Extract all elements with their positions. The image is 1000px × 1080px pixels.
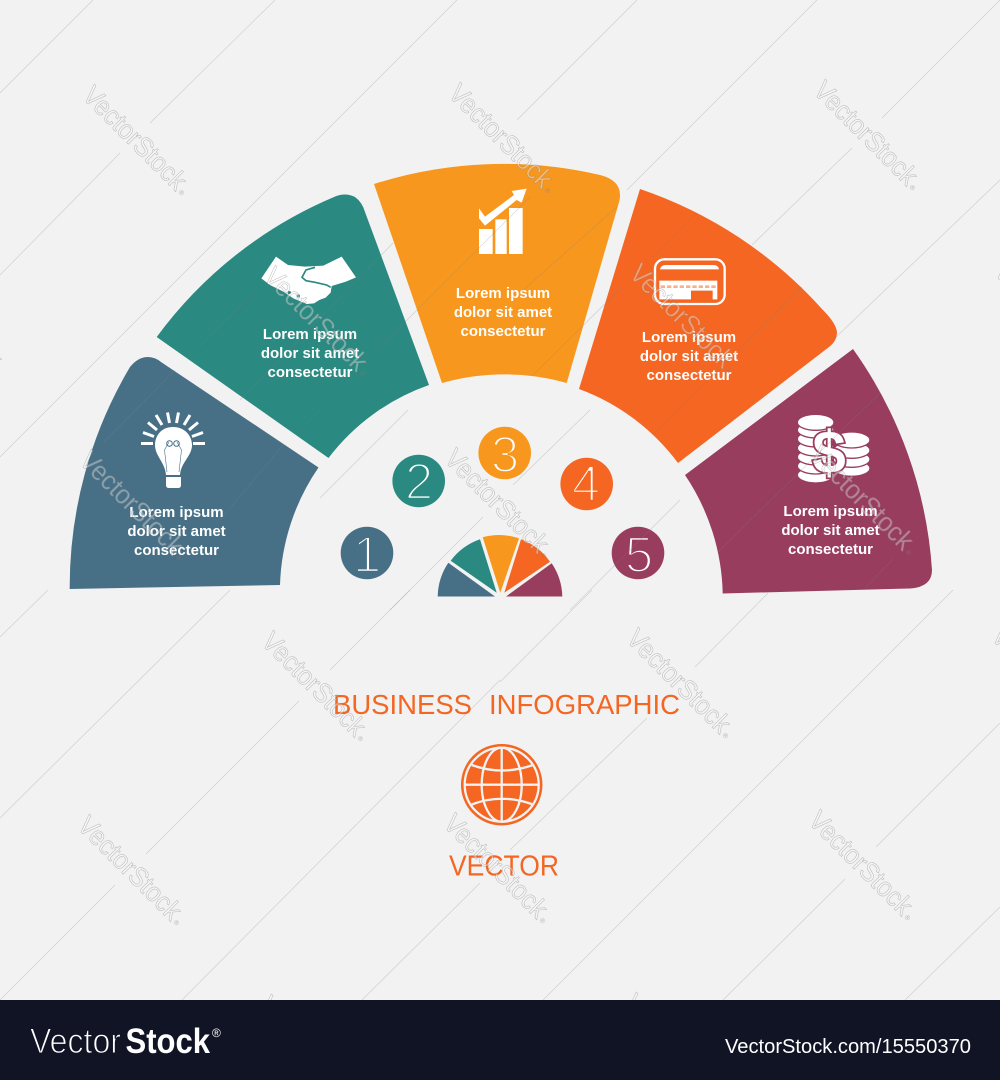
text: segment 3 label: dolor sit amet — [454, 304, 552, 321]
watermark text: VectorStock — [808, 75, 924, 191]
watermark text: ® — [538, 551, 548, 561]
icon: light bulb — [141, 412, 205, 488]
numbered circle 4 — [560, 455, 613, 512]
text: segment 3 label: consectetur — [460, 323, 546, 340]
icon: coin stacks with dollar — [797, 414, 870, 486]
watermark text: VectorStock — [803, 805, 919, 921]
subtitle: VECTOR — [449, 850, 559, 882]
watermark text: ® — [723, 366, 733, 376]
text: segment 5 label: dolor sit amet — [781, 522, 880, 539]
watermark text: ® — [357, 369, 367, 379]
watermark text: ® — [176, 188, 186, 198]
footer logo: Vector — [30, 1022, 121, 1061]
watermark text: ® — [903, 548, 913, 558]
text: segment 2 label: consectetur — [267, 364, 353, 381]
text: segment 4 label — [640, 329, 738, 384]
panel: segment 2 teal — [157, 194, 429, 458]
watermark text: VectorStock — [72, 810, 188, 926]
text: segment 2 label: dolor sit amet — [261, 345, 359, 362]
numbered circle 1 — [341, 526, 393, 583]
watermark text: VectorStock — [258, 261, 374, 377]
text: segment 1 label: consectetur — [134, 542, 219, 559]
panel: segment 4 orange — [579, 189, 837, 463]
footer logo: ® — [212, 1026, 221, 1040]
numbered circle 1: 1 — [353, 526, 381, 583]
watermark text: VectorStock — [438, 808, 554, 924]
text: segment 3 label: Lorem ipsum — [456, 285, 550, 302]
title: INFOGRAPHIC — [489, 689, 680, 720]
title: BUSINESS — [333, 689, 472, 720]
text: segment 4 label: Lorem ipsum — [642, 329, 736, 346]
text: segment 2 label — [261, 326, 359, 381]
watermark text: VectorStock — [77, 80, 193, 196]
watermark text: ® — [907, 183, 917, 193]
numbered circle 2: 2 — [405, 453, 433, 510]
numbered circle 3: 3 — [491, 426, 519, 483]
footer bar — [0, 1000, 1000, 1080]
text: segment 5 label: Lorem ipsum — [783, 503, 878, 520]
icon: rising bar chart — [479, 189, 527, 254]
footer logo — [30, 1022, 221, 1061]
panel: segment 1 blue — [70, 357, 318, 589]
text: segment 1 label: dolor sit amet — [127, 523, 226, 540]
watermark text: VectorStock — [621, 623, 737, 739]
text: segment 4 label: dolor sit amet — [640, 348, 738, 365]
icon: credit card — [655, 259, 725, 304]
watermark text: ® — [537, 916, 547, 926]
panel: segment 3 amber — [374, 164, 620, 383]
icon: handshake — [261, 257, 356, 304]
text: segment 4 label: consectetur — [646, 367, 732, 384]
watermark text: VectorStock — [804, 440, 920, 556]
numbered circle 3 — [478, 426, 531, 483]
text: segment 5 label — [781, 503, 880, 558]
watermark text: VectorStock — [443, 78, 559, 194]
icon: coin stacks with dollar: $ — [812, 419, 846, 486]
watermark text: ® — [542, 186, 552, 196]
text: segment 5 label: consectetur — [788, 541, 873, 558]
watermark text: VectorStock — [74, 445, 190, 561]
watermark text: VectorStock — [439, 443, 555, 559]
watermark text: ® — [355, 734, 365, 744]
footer logo: Stock — [126, 1022, 210, 1061]
mini semicircle chart — [438, 535, 562, 596]
panel: segment 5 plum — [685, 349, 932, 594]
numbered circle 5 — [612, 526, 664, 583]
footer image id: VectorStock.com/15550370 — [725, 1036, 971, 1058]
text: segment 1 label — [127, 504, 226, 559]
title — [333, 689, 680, 720]
watermark text: VectorStock — [256, 626, 372, 742]
text: segment 3 label — [454, 285, 552, 340]
watermark text: ® — [720, 731, 730, 741]
numbered circle 4: 4 — [572, 455, 600, 512]
watermark text: VectorStock — [624, 258, 740, 374]
icon: globe — [462, 745, 541, 824]
text: segment 2 label: Lorem ipsum — [263, 326, 357, 343]
watermark text: ® — [173, 553, 183, 563]
numbered circle 5: 5 — [625, 526, 653, 583]
watermark text: ® — [171, 918, 181, 928]
text: segment 1 label: Lorem ipsum — [129, 504, 224, 521]
numbered circle 2 — [392, 453, 445, 510]
watermark text: ® — [902, 913, 912, 923]
